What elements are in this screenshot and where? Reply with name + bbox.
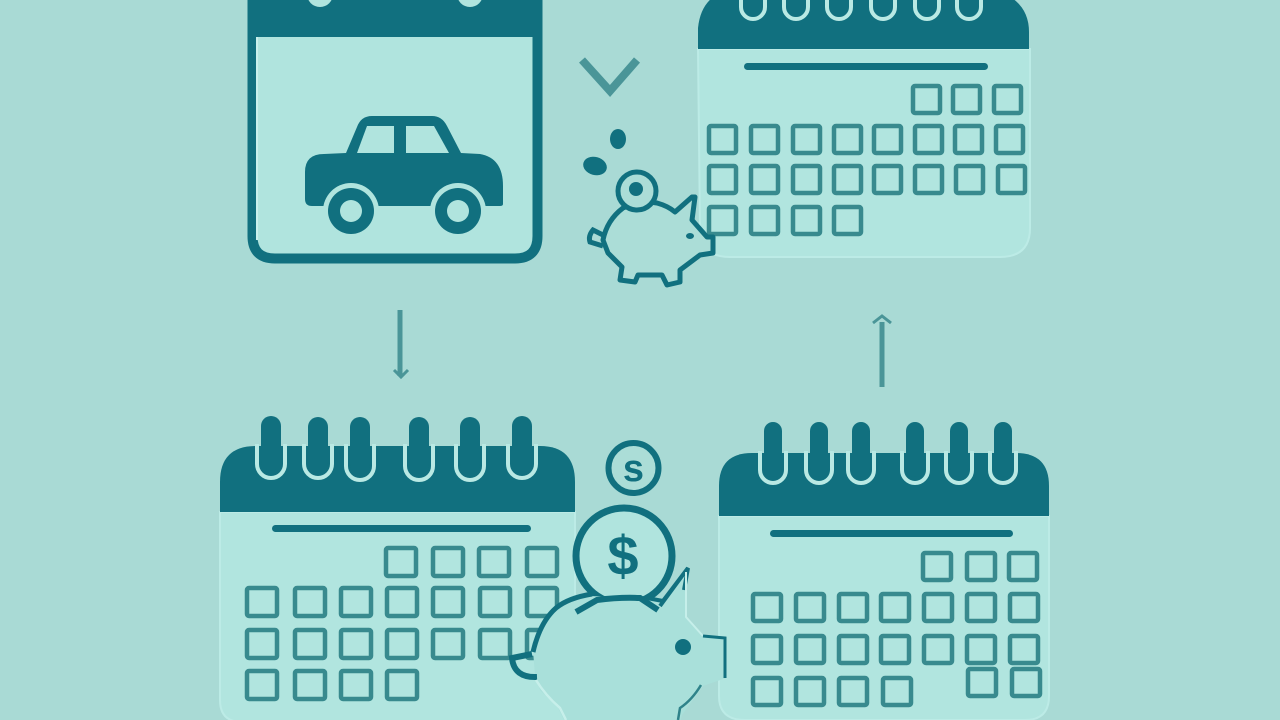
calendar: top right — [698, 0, 1030, 257]
calendar: bottom right — [719, 422, 1049, 720]
icon: small dollar coin: s — [623, 448, 644, 490]
piggy tail — [589, 230, 603, 246]
piggy tail — [512, 654, 537, 677]
calendar: bottom left — [220, 416, 575, 720]
arrow: up — [873, 316, 891, 387]
icon: small piggy bank with coin — [589, 172, 713, 285]
icon: falling coins — [581, 129, 626, 178]
icon: large dollar coin: $ — [607, 524, 639, 587]
calendar: car, top left — [248, 0, 542, 258]
icon: small dollar coin — [608, 443, 658, 493]
icon: car — [305, 116, 503, 239]
icon: large piggy bank — [512, 568, 726, 720]
icon: large dollar coin — [576, 508, 672, 604]
icon: down chevron — [582, 60, 637, 91]
arrow: down — [394, 310, 408, 377]
